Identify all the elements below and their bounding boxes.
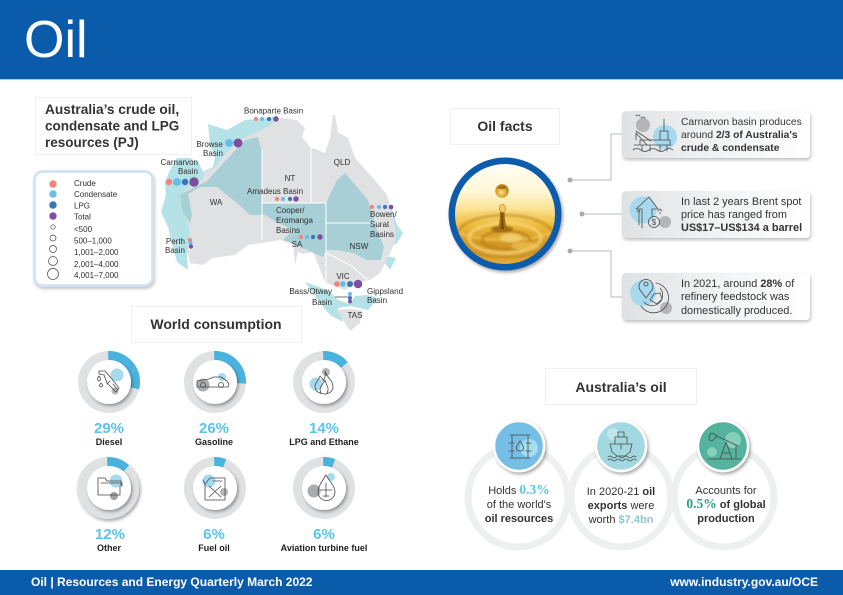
map legend: 500–1,000 — [74, 236, 112, 246]
map labels: Basins — [370, 230, 394, 239]
fact card: refinery feedstock: In 2021, around 28% of — [681, 278, 795, 290]
state borders — [262, 147, 390, 287]
icon: folder — [98, 474, 122, 500]
donut: fuel oil: Fuel oil — [198, 543, 230, 553]
map labels: Carnarvon — [161, 158, 198, 167]
donut: other: 12% — [95, 526, 125, 543]
donut: other — [77, 457, 139, 553]
icon: oil barrel — [509, 435, 538, 458]
map labels: Basins — [276, 226, 300, 235]
footer url: www.industry.gov.au/OCE — [669, 575, 818, 589]
map legend: Condensate — [74, 190, 118, 199]
donut: gasoline: Gasoline — [195, 437, 233, 447]
donut: other: Other — [97, 543, 121, 553]
Australia's oil heading: Australia’s oil — [575, 379, 667, 395]
map title: Australia’s crude oil, — [45, 102, 179, 117]
map legend: LPG — [74, 202, 90, 210]
icon: ship — [607, 428, 636, 461]
oil facts heading: Oil facts — [477, 118, 533, 134]
map legend: Crude — [74, 179, 96, 188]
map labels: WA — [210, 198, 223, 207]
donut: aviation turbine fuel: Aviation turbine fuel — [281, 543, 367, 553]
map labels: Basin — [165, 246, 185, 255]
fact card: refinery feedstock: refinery feedstock was — [681, 291, 790, 303]
map labels: Browse — [196, 140, 224, 149]
fact card: Carnarvon: around 2/3 of Australia's — [681, 130, 798, 141]
donut: gasoline — [184, 351, 246, 447]
stat: oil exports: worth $7.4bn — [588, 514, 654, 526]
land — [182, 115, 396, 290]
map legend — [34, 172, 152, 286]
icon: flame — [310, 368, 333, 394]
stat: oil resources — [468, 421, 568, 547]
map labels: NSW — [350, 242, 369, 251]
map legend: 2,001–4,000 — [74, 260, 119, 269]
stat: oil exports — [571, 421, 671, 547]
map labels — [161, 106, 403, 320]
donut: aviation turbine fuel: 6% — [313, 526, 335, 543]
stat: oil resources: of the world's — [487, 499, 552, 511]
stat: oil resources: Holds 0.3% — [488, 482, 550, 497]
map title — [36, 98, 192, 154]
world consumption heading — [132, 306, 302, 342]
map labels: NT — [285, 174, 295, 183]
fact card: Carnarvon: crude & condensate — [681, 143, 780, 154]
resource dots — [166, 116, 393, 304]
stat: oil exports: exports were — [588, 500, 654, 512]
fact card: Brent price: $ — [652, 218, 657, 227]
fact card: refinery feedstock: domestically produced. — [681, 305, 792, 317]
world consumption heading: World consumption — [150, 316, 282, 332]
icon: plane in droplet — [308, 473, 335, 500]
icon: offshore platform — [633, 115, 677, 152]
icon: fuel nozzle — [98, 368, 124, 394]
donut: gasoline: 26% — [199, 420, 229, 437]
icon: map pin and globe — [630, 279, 672, 314]
fact card: Carnarvon — [622, 111, 810, 158]
stat: oil exports: In 2020-21 oil — [587, 486, 655, 498]
map legend: Total — [74, 212, 91, 222]
map labels: Eromanga — [276, 216, 313, 225]
Tasmania — [337, 309, 362, 331]
footer source: Oil | Resources and Energy Quarterly March 2022 — [31, 575, 313, 589]
icon: price arrow — [630, 196, 671, 228]
map legend: 4,001–7,000 — [74, 271, 119, 280]
map title: resources (PJ) — [45, 135, 139, 150]
map labels: Basin — [203, 149, 223, 158]
oil facts heading — [450, 108, 560, 144]
header band — [0, 0, 843, 80]
fact card: Brent price: price has ranged from — [681, 209, 787, 221]
map labels: Gippsland — [367, 287, 403, 296]
fact card: Brent price: US$17–US$134 a barrel — [681, 222, 802, 234]
donut: fuel oil: 6% — [203, 526, 225, 543]
stat: global production — [674, 421, 774, 547]
stat: oil resources: oil resources — [485, 513, 553, 525]
fact card: Brent price: In last 2 years Brent spot — [681, 196, 801, 208]
icon: oil pump — [707, 432, 741, 459]
connector lines — [568, 134, 622, 297]
fact card: Brent price — [622, 191, 810, 238]
stat: global production: production — [697, 513, 755, 525]
donut: LPG and ethane: LPG and Ethane — [289, 437, 359, 447]
oil droplet photo — [448, 158, 562, 270]
map labels: Perth — [166, 237, 185, 246]
map labels: SA — [292, 240, 303, 249]
map labels: QLD — [334, 158, 350, 167]
map of Australia — [161, 106, 403, 331]
stat: global production: Accounts for — [695, 485, 757, 497]
icon: car — [196, 373, 229, 392]
donut: LPG and ethane: 14% — [309, 420, 339, 437]
map labels: Bowen/ — [370, 210, 397, 219]
map labels: VIC — [336, 272, 350, 281]
stat: global production: 0.5% of global — [686, 496, 766, 511]
page title: Oil — [24, 11, 88, 69]
donut: diesel: Diesel — [96, 437, 122, 447]
fact card: refinery feedstock — [622, 273, 810, 320]
Australia's oil heading — [546, 368, 696, 404]
map legend: <500 — [74, 225, 93, 234]
footer band — [0, 570, 843, 595]
map labels: Basin — [178, 167, 198, 176]
icon: jerry can — [202, 474, 228, 500]
offshore basins — [161, 115, 277, 270]
map labels: Cooper/ — [276, 206, 305, 215]
onshore basins — [180, 137, 270, 223]
map labels: Bonaparte Basin — [244, 106, 303, 116]
donut: fuel oil — [184, 457, 246, 553]
fact card: Carnarvon: Carnarvon basin produces — [681, 117, 802, 128]
map labels: Basin — [312, 298, 332, 307]
map labels: Amadeus Basin — [247, 187, 303, 196]
map labels: Surat — [370, 220, 390, 229]
map labels: TAS — [348, 311, 362, 320]
donut: diesel — [78, 351, 140, 447]
donut: aviation turbine fuel — [281, 457, 367, 553]
donut: diesel: 29% — [94, 420, 124, 437]
map labels: Bass/Otway — [289, 287, 332, 296]
map legend: 1,001–2,000 — [74, 248, 119, 257]
map labels: Basin — [367, 296, 387, 305]
donut: LPG and ethane — [289, 351, 359, 447]
map title: condensate and LPG — [45, 118, 179, 134]
